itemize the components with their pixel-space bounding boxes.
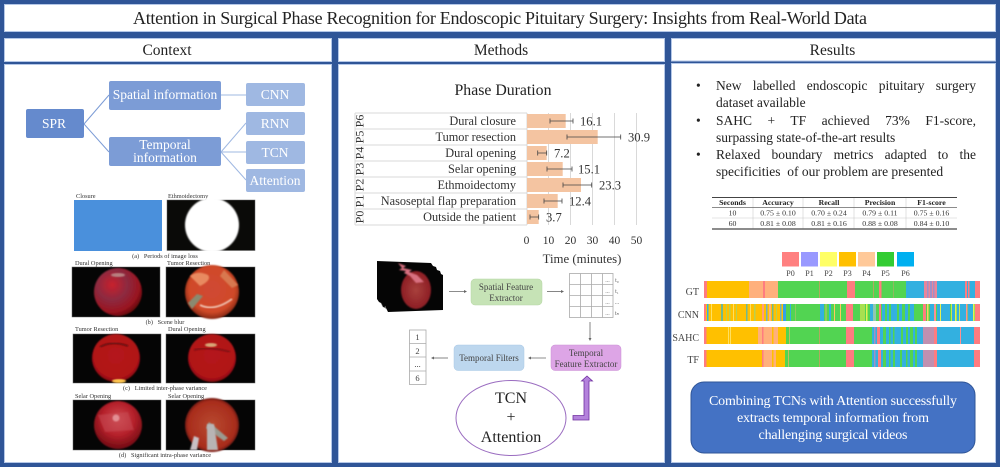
figure: periods of image loss <box>74 193 255 260</box>
timeline: CNN <box>704 304 980 321</box>
output phase list: 1 <box>415 332 420 342</box>
feature matrix: ... <box>605 278 610 284</box>
output phase list: ... <box>414 359 421 369</box>
box: spatial feature extractor: Extractor <box>489 293 523 303</box>
text block: results bullets: Relaxed boundary metrics adapted to the <box>716 147 976 162</box>
results table: 0.88 ± 0.08 <box>862 219 898 228</box>
output phase list: 6 <box>415 373 420 383</box>
feature matrix <box>570 274 620 318</box>
heading: results <box>672 38 996 61</box>
phase labels: Nasoseptal flap preparation <box>381 194 516 208</box>
panel: methods <box>338 38 664 462</box>
results table: Seconds <box>719 198 746 207</box>
arrows <box>431 290 592 360</box>
legend: phase colours: P3 <box>843 269 852 278</box>
timeline: SAHC <box>704 327 980 344</box>
x axis: Time (minutes) <box>543 252 621 266</box>
phase codes: P2 <box>352 179 366 191</box>
phase codes <box>352 115 366 223</box>
text block: results bullets: surpassing state-of-the-art results <box>716 130 895 145</box>
phase labels: Tumor resection <box>436 130 516 144</box>
value labels: 16.1 <box>580 114 602 128</box>
box: temporal feature extractor <box>551 345 621 370</box>
results table <box>712 197 957 229</box>
value labels: 3.7 <box>546 210 562 224</box>
figure: scene blur: (b) Scene blur <box>146 319 185 326</box>
results table: 0.75 ± 0.10 <box>760 208 796 218</box>
figure: limited inter-phase variance <box>73 326 255 392</box>
feature matrix: ... <box>615 300 620 306</box>
results table: 0.81 ± 0.16 <box>811 219 847 228</box>
results table: Accuracy <box>762 198 794 207</box>
callout: conclusion: challenging surgical videos <box>758 428 908 443</box>
tree diagram: SPR taxonomy: TCN <box>262 145 289 160</box>
panel: results <box>672 38 996 462</box>
box: temporal filters: Temporal Filters <box>459 353 519 363</box>
chart: phase duration <box>352 82 650 266</box>
figure: scene blur: Tumor Resection <box>167 260 211 267</box>
diagram: processing pipeline <box>377 261 621 456</box>
phase codes: P5 <box>352 131 366 143</box>
phase codes: P3 <box>352 163 366 175</box>
box: spatial feature extractor <box>471 279 542 305</box>
results table: 0.81 ± 0.08 <box>760 219 796 228</box>
text block: results bullets: dataset available <box>716 95 806 110</box>
box: temporal feature extractor: Temporal <box>569 348 604 358</box>
timeline labels: GT <box>686 287 699 298</box>
text block: results bullets: New labelled endoscopic pituitary surgery <box>716 78 976 93</box>
phase codes: P0 <box>352 211 366 223</box>
value labels: 23.3 <box>599 178 621 192</box>
feature matrix: ... <box>605 289 610 295</box>
icon: stack of video frames <box>377 261 443 312</box>
results table: 0.75 ± 0.16 <box>914 208 949 218</box>
x axis: 30 <box>587 235 598 247</box>
phase labels: Dural opening <box>445 146 516 160</box>
tree diagram: SPR taxonomy: RNN <box>261 116 289 131</box>
tree diagram: SPR taxonomy: Attention <box>250 173 301 188</box>
x axis: 40 <box>609 235 620 247</box>
feature matrix: t₁ <box>615 289 619 295</box>
timeline: TF <box>704 350 980 367</box>
phase labels: Ethmoidectomy <box>437 178 517 192</box>
phase labels: Outside the patient <box>423 210 517 224</box>
callout: conclusion: extracts temporal information from <box>737 411 929 426</box>
feature matrix: ... <box>605 311 610 317</box>
box: temporal feature extractor: Feature Extractor <box>555 359 617 369</box>
figure: periods of image loss: Closure <box>76 193 96 200</box>
heading: context <box>4 38 332 62</box>
results table: 10 <box>729 208 736 218</box>
bars <box>527 114 598 224</box>
phase codes: P6 <box>352 115 366 127</box>
figure: scene blur <box>72 260 255 326</box>
legend: phase colours: P6 <box>901 269 910 278</box>
output phase list <box>410 330 426 384</box>
x axis: 50 <box>631 235 642 247</box>
callout: conclusion <box>691 382 975 453</box>
text block: results bullets: • <box>696 78 701 93</box>
figure: periods of image loss: (a) Periods of image loss <box>132 253 198 260</box>
phase labels: Dural closure <box>449 114 517 128</box>
legend: phase colours: P4 <box>862 269 871 278</box>
value labels <box>546 114 650 224</box>
results table: Recall <box>819 198 840 207</box>
legend: phase colours: P2 <box>824 269 833 278</box>
feature matrix: tₙ <box>615 311 620 317</box>
error bars <box>530 118 621 220</box>
figure: periods of image loss: Ethmoidectomy <box>168 193 209 200</box>
tree diagram: SPR taxonomy: CNN <box>261 87 289 102</box>
tree diagram: SPR taxonomy <box>26 81 305 192</box>
heading: methods <box>338 38 664 62</box>
text block: results bullets: specificities of our problem are presented <box>716 164 943 179</box>
value labels: 7.2 <box>554 146 570 160</box>
box: temporal filters <box>454 345 524 370</box>
legend: phase colours: P1 <box>805 269 814 278</box>
x axis: 0 <box>524 235 530 247</box>
timeline labels: TF <box>687 355 699 366</box>
timeline labels: SAHC <box>672 333 699 344</box>
x axis <box>524 235 642 266</box>
phase labels: Selar opening <box>448 162 516 176</box>
callout: TCN + Attention: + <box>506 409 516 426</box>
callout: TCN + Attention <box>456 380 566 456</box>
phase labels <box>381 114 517 224</box>
timeline labels: CNN <box>678 310 699 321</box>
figure: significant intra-phase variance: Selar Opening <box>168 393 205 400</box>
text block: results bullets: • <box>696 113 701 128</box>
heading: context: Context <box>142 42 192 59</box>
legend: phase colours: P0 <box>786 269 795 278</box>
results table: Precision <box>865 198 896 207</box>
tree diagram: SPR taxonomy: Temporal <box>139 137 191 152</box>
title banner <box>4 4 996 32</box>
results table: F1-score <box>917 198 946 207</box>
tree diagram: SPR taxonomy: Spatial information <box>113 87 218 102</box>
results table: 0.84 ± 0.10 <box>914 219 949 228</box>
arrow: bent purple <box>573 376 592 420</box>
results table: 0.79 ± 0.11 <box>862 208 898 218</box>
results table: 0.70 ± 0.24 <box>811 208 847 218</box>
text block: results bullets: • <box>696 147 701 162</box>
timeline labels <box>672 287 699 366</box>
tree diagram: SPR taxonomy: information <box>133 150 197 165</box>
figure: scene blur: Dural Opening <box>75 260 113 267</box>
figure: limited inter-phase variance: Dural Opening <box>168 326 206 333</box>
tree diagram: SPR taxonomy: SPR <box>42 116 66 131</box>
x axis: 10 <box>543 235 554 247</box>
text block: results bullets: SAHC + TF achieved 73% F1-score, <box>716 113 976 128</box>
timeline: GT <box>704 281 980 298</box>
box: spatial feature extractor: Spatial Feature <box>479 282 533 292</box>
figure: significant intra-phase variance: Selar Opening <box>75 393 112 400</box>
value labels: 30.9 <box>628 130 650 144</box>
callout: TCN + Attention: TCN <box>495 390 527 407</box>
legend: phase colours <box>782 252 914 278</box>
figure: significant intra-phase variance: (d) Significant intra-phase variance <box>119 452 211 459</box>
figure: significant intra-phase variance <box>73 393 255 459</box>
results table: 60 <box>729 219 736 228</box>
grid lines <box>355 113 636 225</box>
figure: limited inter-phase variance: (c) Limited inter-phase variance <box>123 385 207 392</box>
value labels: 15.1 <box>578 162 600 176</box>
phase codes: P1 <box>352 195 366 207</box>
heading: methods: Methods <box>474 42 528 59</box>
heading: results: Results <box>810 42 855 59</box>
callout: TCN + Attention: Attention <box>481 429 541 446</box>
value labels: 12.4 <box>569 194 592 208</box>
feature matrix: t₀ <box>615 278 619 284</box>
text block: results bullets <box>696 78 976 179</box>
panel: context <box>4 38 332 462</box>
feature matrix: ... <box>605 300 610 306</box>
x axis: 20 <box>565 235 576 247</box>
output phase list: 2 <box>415 346 420 356</box>
phase codes: P4 <box>352 147 366 159</box>
figure: limited inter-phase variance: Tumor Resection <box>75 326 119 333</box>
callout: conclusion: Combining TCNs with Attention successfully <box>709 394 957 409</box>
chart: phase duration: Phase Duration <box>455 82 552 99</box>
legend: phase colours: P5 <box>881 269 890 278</box>
title banner: Attention in Surgical Phase Recognition for Endoscopic Pituitary Surgery: Insights from Real-World Data <box>133 8 867 28</box>
